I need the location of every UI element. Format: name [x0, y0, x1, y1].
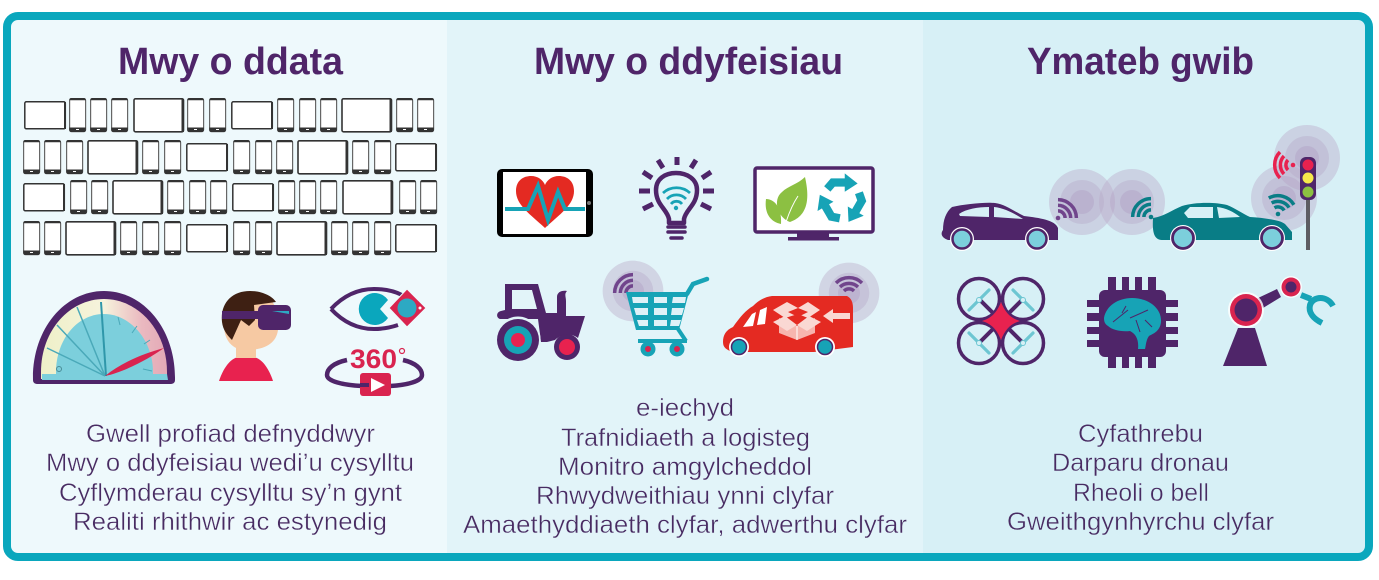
text: sectors list: e-iechyd: [636, 394, 734, 422]
panel: Mwy o ddyfeisiau: [463, 41, 907, 539]
text: benefits list: Gwell profiad defnyddwyr: [86, 420, 375, 448]
text: applications list: [1007, 420, 1274, 536]
panel: Ymateb gwib: [942, 41, 1340, 536]
icon: wifi signals: [1052, 152, 1295, 224]
panel: Mwy o ddata: [23, 41, 437, 536]
text: applications list: Cyfathrebu: [1078, 420, 1203, 448]
icon: speedometer: [33, 291, 175, 384]
icon: chip with brain: [1087, 277, 1178, 368]
heading: Mwy o ddyfeisiau: Mwy o ddyfeisiau: [534, 41, 843, 83]
icon: eye with AR marker: [331, 289, 426, 329]
icon: drone: [958, 278, 1044, 364]
icon: 360 degree video: 360: [350, 344, 397, 374]
icon: 360 degree video: [327, 344, 422, 396]
text: applications list: Rheoli o bell: [1073, 479, 1209, 507]
text: sectors list: Amaethyddiaeth clyfar, adwerthu clyfar: [463, 511, 907, 539]
device grid: [23, 98, 437, 255]
text: benefits list: Mwy o ddyfeisiau wedi’u cysylltu: [46, 449, 414, 477]
text: applications list: Darparu dronau: [1052, 449, 1229, 477]
heading: Ymateb gwib: Ymateb gwib: [1027, 41, 1254, 83]
icon: delivery van with signal: [723, 263, 879, 357]
icon: tractor: [496, 284, 585, 362]
icon: robot arm: [1223, 276, 1333, 366]
illustration: connected cars and traffic light: [942, 125, 1340, 251]
icon: smart light bulb: [639, 157, 714, 238]
text: benefits list: [46, 420, 414, 536]
icon: traffic light: [1300, 157, 1316, 250]
text: sectors list: Trafnidiaeth a logisteg: [561, 424, 810, 452]
icon: purple car: [942, 203, 1058, 251]
icon: teal car: [1153, 203, 1292, 251]
icon: monitor with leaf and recycle: [755, 168, 873, 240]
text: benefits list: Cyflymderau cysylltu sy’n gynt: [59, 479, 402, 507]
text: applications list: Gweithgynhyrchu clyfar: [1007, 508, 1274, 536]
heading: Mwy o ddata: Mwy o ddata: [118, 41, 344, 83]
text: sectors list: Monitro amgylcheddol: [558, 453, 812, 481]
text: benefits list: Realiti rhithwir ac estynedig: [73, 508, 387, 536]
icon: tablet with heart: [497, 169, 593, 237]
icon: shopping cart with signal: [603, 261, 707, 356]
icon: person with VR headset: [219, 291, 291, 381]
text: sectors list: [463, 394, 907, 539]
text: sectors list: Rhwydweithiau ynni clyfar: [536, 482, 834, 510]
